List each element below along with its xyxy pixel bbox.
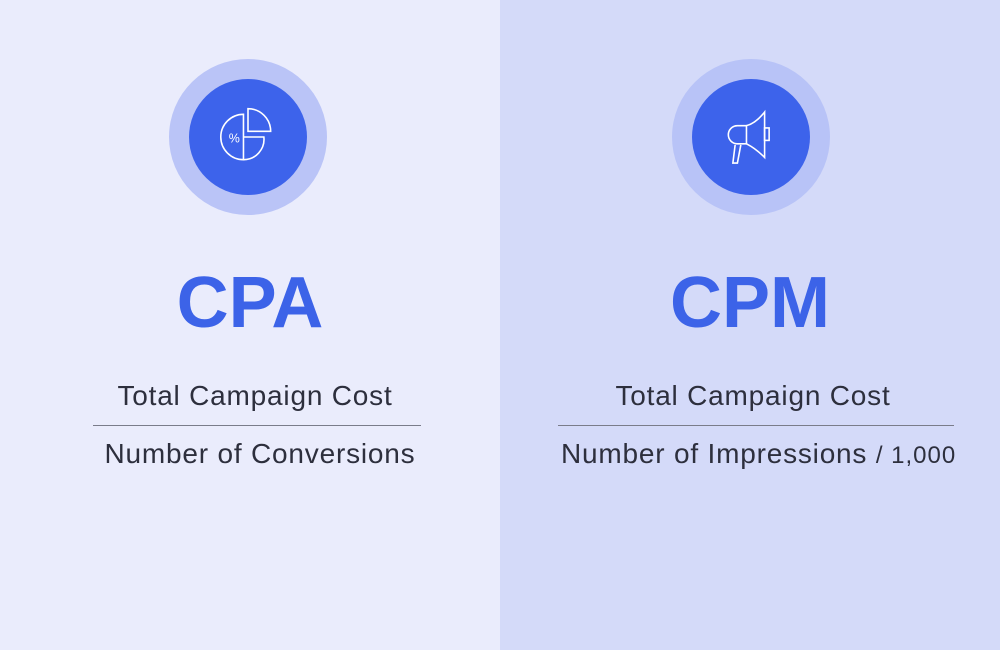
numerator: Total Campaign Cost [117, 380, 393, 411]
heading: CPA: CPA [177, 263, 323, 343]
icon: megaphone [672, 59, 830, 215]
numerator: Total Campaign Cost [615, 380, 891, 411]
panel: CPA [0, 0, 500, 650]
formula: CPA [93, 380, 421, 469]
heading: CPM: CPM [670, 263, 830, 343]
denominator: Number of Impressions / 1,000 [561, 438, 956, 469]
icon: pie chart: % [229, 132, 240, 146]
panel: CPM [500, 0, 1000, 650]
denominator: Number of Conversions [105, 438, 415, 469]
formula: CPM [558, 380, 956, 469]
icon: pie chart [169, 59, 327, 215]
